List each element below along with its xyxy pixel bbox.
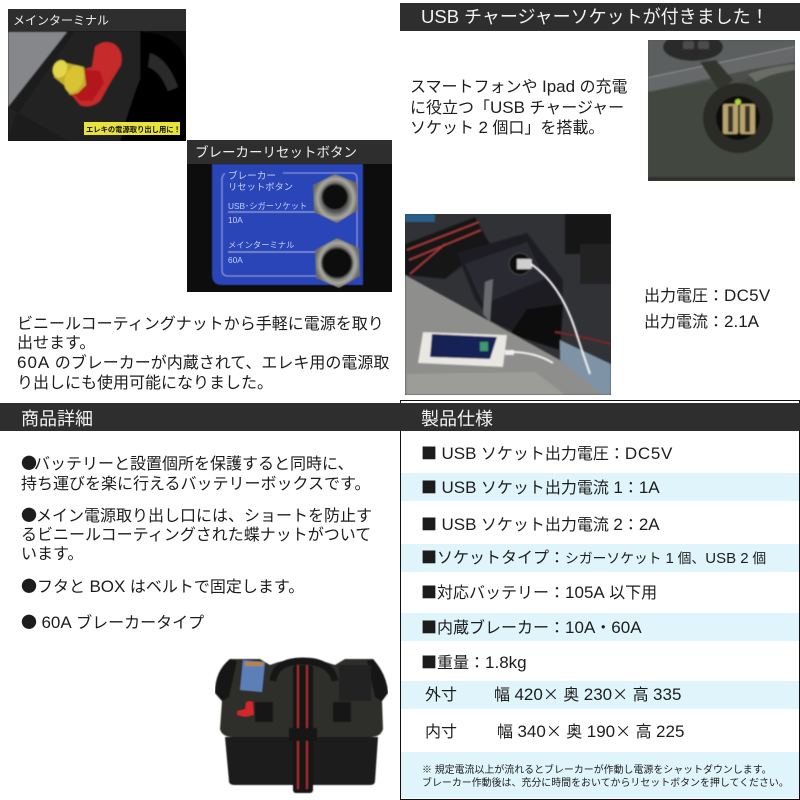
band: row 6 (401, 613, 799, 641)
panel labels: リセットボタン (228, 182, 293, 192)
spec: inner dimensions: 内寸 (425, 724, 457, 741)
icon: upper breaker button (313, 174, 358, 223)
heading: USB charger socket (400, 3, 800, 31)
heading: product details: 商品詳細 (21, 408, 93, 428)
bullet: butterfly nut: ●メイン電源取り出し口には、ショートを防止す (21, 502, 372, 526)
heading: product details (0, 403, 400, 431)
photo: battery box (215, 656, 388, 794)
spec: inner dimension values: 幅 340× 奥 190× 高 225 (497, 718, 684, 742)
band: note (401, 752, 799, 798)
spec: USB voltage: ■ USB ソケット出力電圧：DC5V (421, 440, 673, 464)
body text: vinyl coated nut description: 出せます。 (17, 335, 95, 352)
caption: yellow label: エレキの電源取り出し用に！ (86, 125, 181, 134)
band: row 4 (401, 544, 799, 572)
photo: breaker reset buttons (187, 140, 392, 292)
bullet: protects battery (21, 450, 370, 493)
bullet: 60A breaker: ● 60A ブレーカータイプ (21, 609, 204, 633)
text: output current: 出力電流：2.1A (644, 312, 759, 331)
bullet: butterfly nut: るビニールコーティングされた蝶ナットがついて (21, 527, 371, 544)
panel labels: 60A (228, 255, 243, 265)
body text: USB socket description: ソケット 2 個口」を搭載。 (410, 118, 604, 137)
spec: weight: ■重量：1.8kg (421, 649, 527, 673)
caption: yellow label (84, 122, 181, 135)
header: breaker reset button: ブレーカーリセットボタン (195, 144, 357, 160)
icon: lower breaker button (315, 238, 360, 288)
spec: breaker: ■内蔵ブレーカー：10A・60A (421, 614, 642, 638)
bullet: butterfly nut: います。 (21, 546, 83, 563)
body text: vinyl coated nut description: り出しにも使用可能になりました。 (17, 375, 273, 392)
icon: red terminal cap (237, 701, 254, 717)
body text: USB socket description: に役立つ「USB チャージャー (410, 98, 624, 116)
icon: smartphone (418, 332, 514, 367)
bullet: butterfly nut (21, 502, 372, 563)
icon: USB plug and cable (509, 253, 590, 374)
panel labels: メインターミナル (228, 240, 294, 250)
header: main terminal (8, 9, 186, 31)
header: main terminal: メインターミナル (13, 14, 109, 28)
photo: USB socket closeup (648, 40, 795, 181)
band: row 2 (401, 473, 799, 501)
photo: phone charging from battery box (405, 214, 611, 395)
bullet: belt: ●フタと BOX はベルトで固定します。 (21, 573, 304, 597)
body text: vinyl coated nut description: 60A のブレーカーが内蔵されて、エレキ用の電源取 (17, 353, 389, 372)
spec: USB current 1: ■ USB ソケット出力電流 1：1A (421, 474, 660, 498)
spec: USB current 2: ■ USB ソケット出力電流 2：2A (421, 511, 660, 535)
panel labels: USB･シガーソケット (228, 201, 307, 211)
spec: outer dimension values: 幅 420× 奥 230× 高 335 (494, 681, 681, 705)
heading: product specifications (400, 403, 800, 431)
body text: vinyl coated nut description: ビニールコーティングナットから手軽に電源を取り (17, 316, 384, 332)
heading: USB charger socket: USB チャージャーソケットが付きました！ (421, 6, 769, 27)
body text: USB socket description (410, 77, 628, 137)
photo: main terminal (8, 9, 186, 141)
spec: socket type: ■ソケットタイプ：シガーソケット 1 個、USB 2 個 (421, 544, 766, 568)
panel labels: 10A (228, 215, 243, 225)
note: breaker warning: ブレーカー作動後は、充分に時間をおいてからリセットボタンを押してください。 (422, 778, 789, 788)
panel labels: ブレーカー (228, 170, 276, 182)
panel labels (228, 170, 307, 265)
note: breaker warning (422, 764, 789, 788)
bullet: protects battery: ●バッテリーと設置個所を保護すると同時に、 (21, 450, 354, 474)
band: row 8 (401, 681, 799, 709)
spec: outer dimensions: 外寸 (425, 687, 457, 704)
body text: USB socket description: スマートフォンや Ipad の充電 (410, 77, 628, 96)
icon: strap (289, 665, 317, 793)
header: breaker reset button (187, 140, 392, 164)
heading: product specifications: 製品仕様 (421, 408, 493, 428)
panel: product details (0, 403, 400, 794)
note: breaker warning: ※ 規定電流以上が流れるとブレーカーが作動し電源をシャットダウンします。 (422, 765, 772, 776)
bullet: protects battery: 持ち運びを楽に行えるバッテリーボックスです。 (21, 476, 370, 493)
body text: vinyl coated nut description (17, 315, 389, 392)
text: output voltage: 出力電圧：DC5V (644, 286, 771, 305)
spec: battery: ■対応バッテリー：105A 以下用 (421, 579, 657, 603)
panel: product specifications (400, 400, 800, 800)
